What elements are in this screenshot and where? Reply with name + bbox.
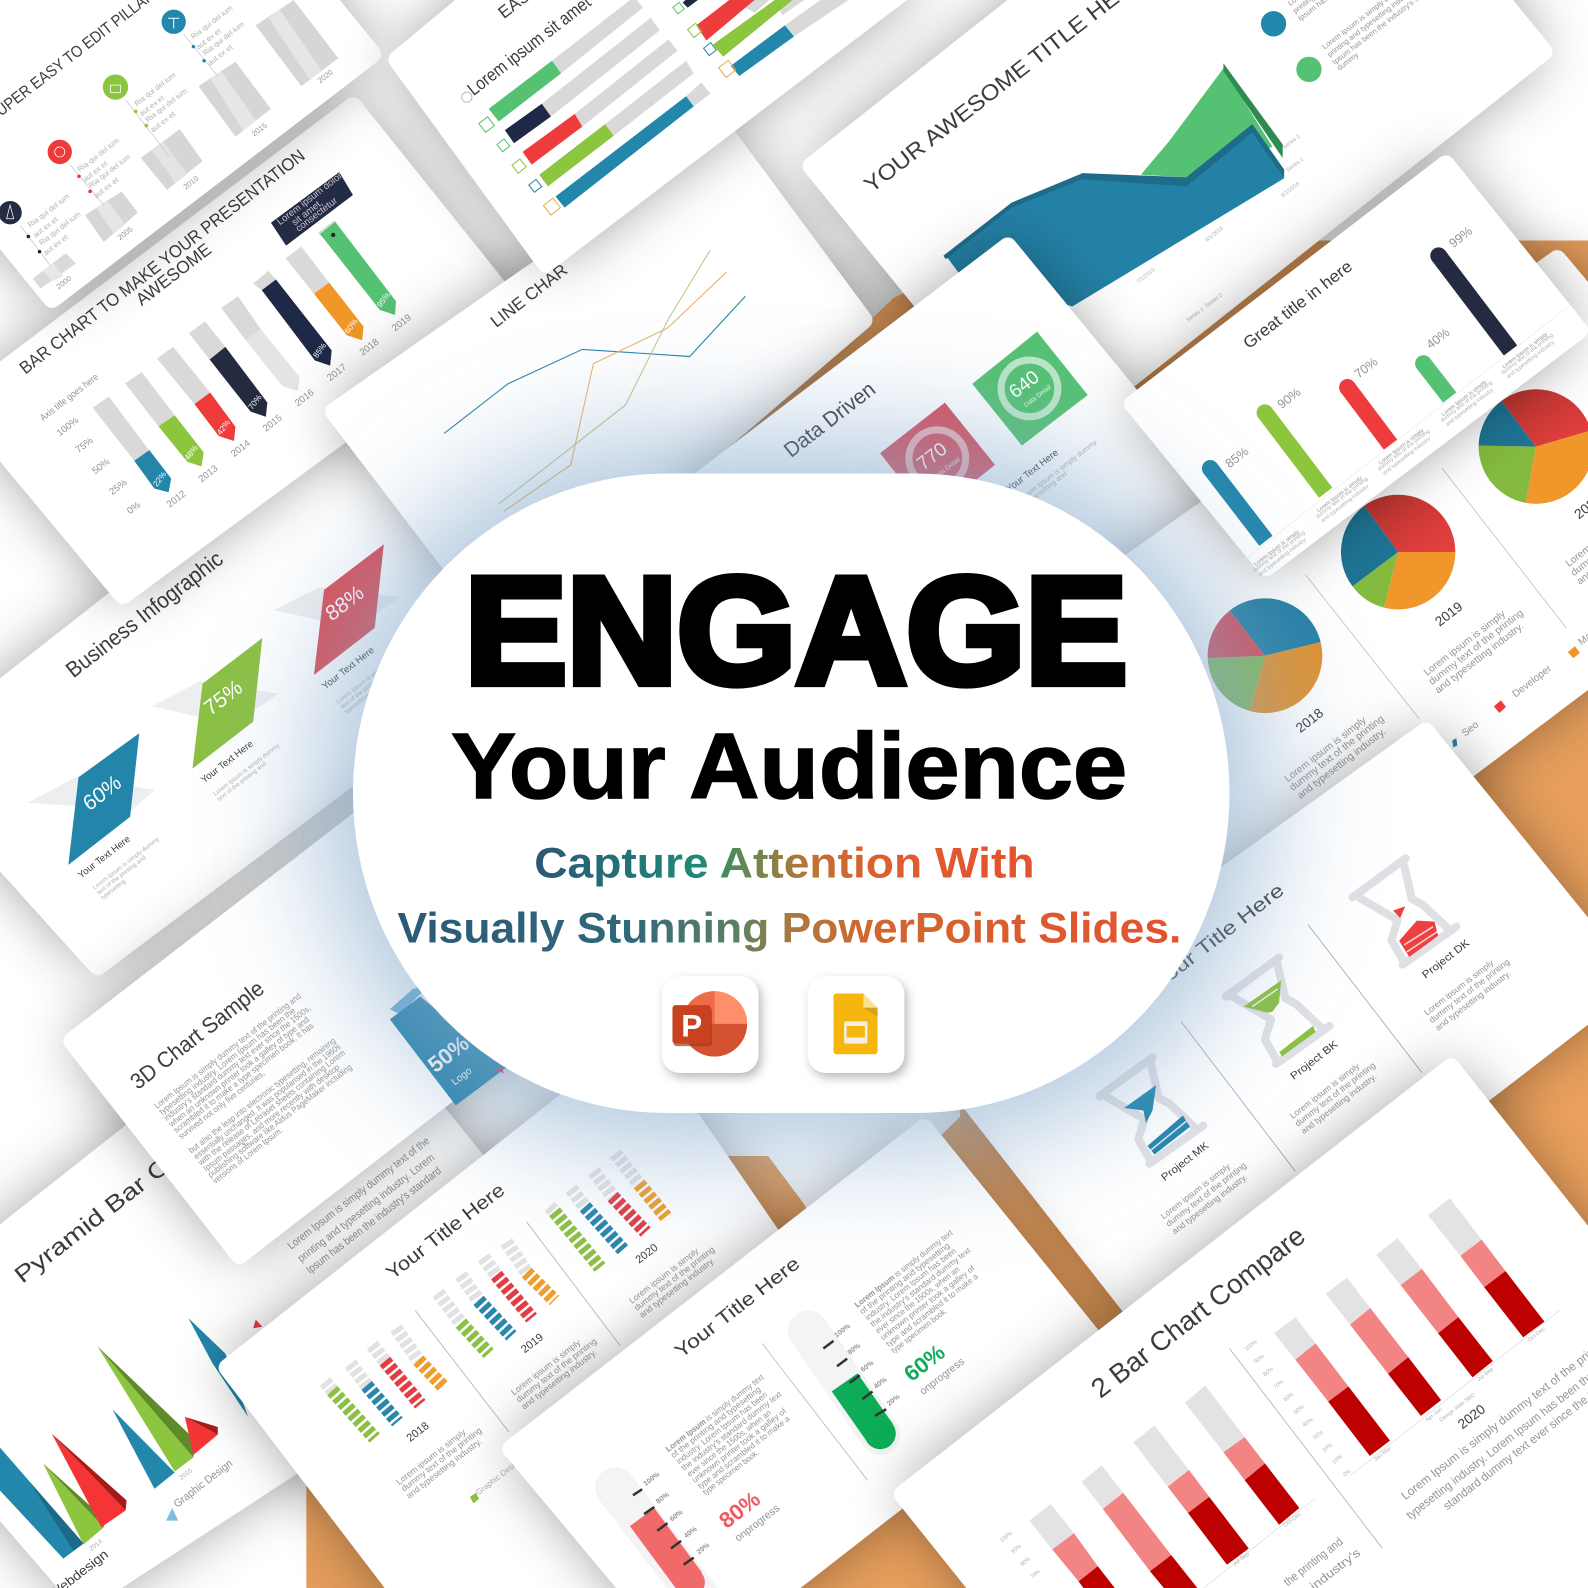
labels: chart years and descriptions: Design Web SBD — [1439, 1392, 1477, 1423]
chart: arrow bars: 85% — [311, 341, 328, 360]
chart: arrow bars: 70% — [247, 393, 263, 411]
icon: green test tube: 100% — [833, 1322, 853, 1339]
panel: area chart slide — [812, 0, 1543, 448]
text: notes under bars: Lorem Ipsum is simply — [1378, 428, 1426, 466]
text: note on slide: Lorem Ipsum is simply dummy text of the — [286, 1135, 432, 1252]
chart: lower stacked bars 2019: 100% — [999, 1531, 1014, 1544]
labels: project names and notes: Lorem ipsum is simply — [1422, 957, 1496, 1017]
chart axis labels — [38, 312, 414, 517]
heading: 3D chart sample: 3D Chart Sample — [125, 976, 269, 1094]
text: red tube description: type and scrambled it to make a — [695, 1413, 792, 1491]
text: chart description: essentially unchanged. It was popularised in the 1960s — [192, 1042, 343, 1161]
chart axis labels: 100% — [55, 415, 81, 439]
subtitle: your audience: Your Audience — [451, 714, 1127, 818]
labels: project names and notes: dummy text of the printing — [1164, 1160, 1248, 1229]
heading: business infographic: Business Infographic — [61, 546, 228, 682]
labels: project names and notes: dummy text of the printing — [1293, 1060, 1377, 1128]
heading: great title: Great title in here — [1239, 257, 1356, 353]
text: your text here: typesetting and — [1026, 471, 1069, 505]
chart axis labels: 2018 — [358, 337, 381, 358]
background: hidden slide behind upper cards — [304, 238, 1013, 861]
labels: pie years and notes: and typesetting industry. — [1295, 726, 1388, 801]
chart: pyramid bars — [0, 1318, 262, 1559]
text: notes under bars: Lorem Ipsum is simply — [1316, 475, 1364, 514]
text: labels under parallelograms: Your Text Here — [199, 739, 256, 786]
chart: three lines — [444, 251, 745, 511]
chart: arrow bars: 48% — [183, 444, 200, 462]
labels: project names and notes: dummy text of the printing — [1427, 957, 1512, 1025]
heading: data driven: Data Driven — [780, 378, 880, 462]
chart: grey pillars — [33, 0, 338, 289]
icon: red test tube: 20% — [696, 1542, 712, 1556]
callout: lorem tooltip: consectetur — [294, 195, 340, 234]
icon: green test tube: 60% — [860, 1359, 876, 1374]
text: chart description: Ipsum passages, and more recently with desktop — [201, 1062, 342, 1173]
labels: project names and notes: Lorem ipsum is simply — [1288, 1061, 1362, 1121]
labels: segmented column years and notes: and typesetting industry. — [404, 1436, 484, 1500]
chart: segmented columns 2019 — [438, 1242, 554, 1354]
labels: bar percentages — [1223, 224, 1475, 471]
legend: pyramid categories — [46, 1458, 235, 1588]
text: labels under parallelograms: typesetting — [100, 879, 127, 901]
chart: 3D area chart: 7/1/2015 — [1136, 267, 1157, 285]
chart: lower stacked bars 2019 — [999, 1385, 1316, 1588]
stat: 80 percent onprogress: 80% — [714, 1486, 765, 1533]
chart: upper stacked bars 2020: 20% — [1322, 1442, 1334, 1454]
chart: upper stacked bars 2020: 30% — [1312, 1430, 1325, 1441]
chart axis labels: 2017 — [325, 362, 349, 384]
labels: chart years and descriptions: the printing and — [1281, 1535, 1346, 1588]
labels: segmented column years and notes: Graphic Design — [474, 1456, 524, 1497]
panel: line chart slide — [334, 137, 863, 630]
text: chart description: with the release of Letraset sheets containing Lorem — [195, 1048, 347, 1168]
text: notes under bars: and typesetting industry — [1506, 340, 1556, 380]
labels: bar percentages: 99% — [1446, 224, 1475, 250]
legend: circles with notes — [1261, 0, 1440, 82]
text: pillar notes: 2020 — [316, 68, 335, 85]
legend: pie categories — [1452, 612, 1588, 747]
chart: pie 2020 — [1479, 389, 1588, 504]
labels: pie years and notes: dummy text of the printing — [1288, 714, 1387, 793]
legend: pyramid categories: Graphic Design — [172, 1458, 235, 1510]
labels: bar percentages: 70% — [1352, 355, 1380, 381]
text: red tube description: the industry's standard dummy text — [679, 1389, 784, 1473]
chart: lower stacked bars 2019: 80% — [1019, 1556, 1032, 1568]
text: chart description — [152, 991, 354, 1185]
chart: upper stacked bars 2020: Oct-Dec — [1527, 1326, 1547, 1343]
stat: 60 percent onprogress: onprogress — [918, 1356, 967, 1397]
chart axis labels: 2016 — [293, 387, 316, 409]
panel: pyramid chart slide — [0, 977, 575, 1588]
text: chart description: survived not only five centuries, — [176, 1068, 267, 1141]
text: pillar notes: Ria qui del ium — [144, 86, 189, 124]
text: pillar notes: Ria qui del ium — [76, 136, 121, 174]
labels: segmented column years and notes: Lorem ipsum is simply — [509, 1337, 583, 1397]
card: red metric 770 — [880, 403, 995, 517]
stat: 80 percent onprogress — [714, 1486, 782, 1544]
chart: arrow bars: 22% — [151, 470, 168, 488]
text: green tube description: Lorem Ipsum is simply dummy text — [852, 1227, 955, 1310]
text: red tube description: type specimen book. — [700, 1447, 761, 1497]
chart: 3D area chart: Series 2 — [1204, 292, 1224, 309]
labels: project names and notes: and typesetting industry. — [1299, 1072, 1378, 1136]
text: pillar notes: 2015 — [250, 121, 269, 138]
chart axis labels: 2014 — [229, 438, 253, 460]
text: labels under parallelograms: Lorem Ipsum is simply dummy — [213, 742, 282, 798]
icon: Google Slides — [808, 976, 904, 1073]
icons: bar row outlines — [462, 2, 736, 215]
chart axis labels: 2015 — [261, 413, 285, 434]
chart: lower stacked bars 2019: Oct-Dec — [1283, 1512, 1303, 1529]
text: red tube description: of the printing and typesetting — [669, 1384, 763, 1460]
callout: lorem tooltip: sit amet, — [290, 197, 325, 228]
icons: pillar circles — [0, 10, 218, 266]
chart: segmented columns 2020 — [549, 1154, 666, 1267]
text: red tube description — [663, 1372, 792, 1497]
panel: segmented bars slide — [228, 1044, 899, 1588]
chart: 3D area chart: 6/1/2016 — [1280, 181, 1301, 199]
heading: your title here: Your Title Here — [382, 1180, 509, 1284]
chart axis labels: 25% — [107, 477, 130, 498]
chart: 3D area chart: 6/1/2015 — [1204, 226, 1225, 244]
labels: project names and notes: Lorem ipsum is simply — [1159, 1161, 1233, 1221]
callout: lorem tooltip: Lorem ipsum dolor — [275, 170, 345, 228]
chart: upper stacked bars 2020: Jan-Mar — [1373, 1446, 1393, 1463]
tagline: visually stunning slides: Visually Stunning PowerPoint Slides. — [398, 904, 1181, 952]
labels: segmented column years and notes: 2019 — [519, 1331, 546, 1356]
text: note on slide: Ipsum has been the industry's standard — [304, 1165, 444, 1276]
labels: segmented column years and notes: 2020 — [633, 1242, 660, 1266]
text: chart description: typesetting industry. Lorem Ipsum has been the — [157, 1005, 297, 1117]
icon: red test tube: 80% — [655, 1491, 671, 1506]
chart: horizontal progress bars — [489, 0, 871, 208]
text: pillar notes: aut ex et — [206, 42, 235, 67]
text: labels under parallelograms: Your Text Here — [320, 645, 377, 692]
chart: lower stacked bars 2019: 90% — [1010, 1544, 1023, 1555]
text: notes under bars: Lorem Ipsum is simply — [1501, 332, 1549, 370]
heading: bar chart title: BAR CHART TO MAKE YOUR PRESENTATION — [15, 145, 309, 378]
chart: 3D column: Logo — [450, 1065, 475, 1088]
text: red tube description: Lorem Ipsum is simply dummy text — [663, 1372, 766, 1454]
labels: segmented column years and notes: 2018 — [405, 1420, 432, 1445]
labels: project names and notes: and typesetting industry. — [1170, 1172, 1249, 1236]
card: red metric 770: Data Detail — [932, 456, 962, 482]
chart: arrow bars: 42% — [215, 418, 232, 437]
chart axis labels: Axis title goes here — [38, 372, 101, 424]
chart: upper stacked bars 2020: 10% — [1331, 1454, 1344, 1466]
text: chart description: but also the leap into electronic typesetting, remaining — [186, 1035, 338, 1155]
text: red tube description: unknown printer took a galley of — [690, 1405, 789, 1485]
stat: 60 percent onprogress — [899, 1339, 967, 1397]
chart: 3D area chart: Series 2 — [1282, 134, 1302, 151]
text: your text here: Lorem Ipsum is simply dummy — [1019, 439, 1099, 503]
legend: pyramid categories: 2015 — [178, 1467, 194, 1482]
tagline: capture attention: Capture Attention With — [534, 840, 1035, 888]
text: your text here: Your Text Here — [1004, 448, 1061, 495]
panel: test tube slide — [511, 1128, 1098, 1588]
text: labels under parallelograms — [76, 645, 405, 901]
text: notes under bars: and typesetting industry — [1382, 436, 1432, 477]
icon: green test tube: 80% — [847, 1342, 863, 1357]
icon: green hourglass — [1226, 958, 1330, 1064]
heading: 2 bar chart compare: 2 Bar Chart Compare — [1085, 1220, 1311, 1404]
chart axis labels: 0% — [125, 499, 143, 517]
panel: data driven slide — [671, 247, 1228, 777]
labels: segmented column years and notes: Lorem ipsum is simply — [627, 1245, 701, 1305]
text: pillar notes: 2010 — [181, 174, 200, 191]
panel: central white badge — [353, 473, 1229, 1113]
text: pillar notes: aut ex et — [137, 93, 167, 118]
text: green tube description: industry. Lorem Ipsum has been — [863, 1246, 958, 1322]
text: notes under bars: and typesetting industry — [1257, 537, 1308, 578]
chart: upper stacked bars 2020: Jul-Sep — [1476, 1367, 1495, 1383]
callout: lorem tooltip — [271, 170, 353, 246]
text: pillar notes: 2005 — [116, 225, 135, 242]
chart: lower stacked bars 2019: Jul-Sep — [1232, 1552, 1251, 1568]
panel: great title bars slide — [1133, 165, 1579, 578]
text: red tube description: industry. Lorem Ipsum has been — [674, 1389, 769, 1466]
text: chart description: versions of Lorem Ipsum. — [210, 1125, 284, 1185]
chart: upper stacked bars 2020: 80% — [1262, 1366, 1275, 1378]
text: green tube description — [852, 1227, 980, 1355]
text: chart description: Lorem Ipsum is simply dummy text of the printing and — [152, 991, 303, 1111]
text: red tube description: ever since the 1500s, when an — [685, 1407, 773, 1479]
labels: segmented column years and notes: Lorem ipsum is simply — [394, 1427, 468, 1487]
text: pillar notes: Ria qui del ium — [37, 210, 82, 247]
text: green tube description: type and scrambled it to make a — [884, 1271, 980, 1349]
labels: pie years and notes: and typesetting industry. — [1433, 621, 1526, 696]
labels: chart years and descriptions: 2020 — [1455, 1401, 1489, 1432]
chart: arrow bars: 95% — [375, 291, 392, 309]
chart: three percent parallelograms — [28, 544, 400, 865]
icon: PowerPoint — [662, 976, 759, 1073]
heading: bar chart title: AWESOME — [132, 239, 215, 309]
panel: 3D chart sample slide — [72, 747, 620, 1255]
labels: project names and notes: Project BK — [1288, 1038, 1340, 1082]
icon: red hourglass — [1353, 858, 1456, 965]
chart axis labels: 2012 — [165, 489, 188, 510]
chart: arrow bars: 60% — [343, 317, 360, 335]
legend: circles with notes: dummy — [1335, 50, 1360, 72]
background: hidden slide behind lower-left cards — [304, 709, 962, 1367]
text: pillar notes — [26, 3, 335, 291]
text: notes under bars: dummy text of the printing — [1315, 476, 1369, 520]
heading: pyramid bar chart: Pyramid Bar Chart — [9, 1122, 214, 1288]
chart: 3D area chart: Series 1 — [1185, 306, 1205, 324]
chart: upper stacked bars 2020: 50% — [1293, 1404, 1305, 1416]
text: chart description: scrambled it to make a type specimen book. It has — [171, 1020, 315, 1135]
labels: bar percentages: 85% — [1223, 444, 1251, 471]
heading: your title here: Your Title Here — [671, 1253, 804, 1363]
chart axis labels: 50% — [90, 456, 113, 477]
chart: three percent parallelograms: 75% — [200, 675, 247, 721]
labels: segmented column years and notes — [394, 1242, 717, 1503]
icon: red test tube — [615, 1471, 712, 1588]
chart: upper stacked bars 2020: 60% — [1283, 1392, 1295, 1403]
text: labels under parallelograms: Lorem Ipsum is simply dummy — [336, 650, 405, 705]
text: green tube description: the industry's standard dummy text — [868, 1245, 973, 1329]
labels: pie years and notes: 2019 — [1432, 599, 1466, 629]
text: notes under bars: dummy text of the printing — [1377, 429, 1431, 472]
chart: upper stacked bars 2020: 100% — [1244, 1339, 1259, 1353]
icon: red test tube: 100% — [643, 1471, 662, 1488]
chart: three percent parallelograms: 60% — [79, 771, 126, 816]
text: pillar notes: aut ex et — [194, 26, 223, 51]
text: green tube description: of the printing and typesetting — [857, 1240, 952, 1316]
chart: segmented columns 2018 — [325, 1328, 443, 1438]
text: chart description: when an unknown printer took a galley of type and — [166, 1014, 311, 1129]
panel: pillar chart slide — [0, 0, 372, 299]
text: pillar notes: aut ex et — [31, 214, 60, 240]
labels: project names and notes: Project MK — [1159, 1140, 1211, 1184]
text: green tube description: ever since the 1500s, when an — [873, 1264, 962, 1335]
text: pillar notes: Ria qui del ium — [26, 192, 71, 229]
icon: green test tube: 40% — [873, 1376, 889, 1391]
labels: bar percentages: 40% — [1424, 325, 1452, 352]
text: chart description: publishing software like Aldus PageMaker including — [206, 1062, 354, 1179]
legend: pyramid categories: 2014 — [88, 1538, 104, 1553]
text: pillar notes: aut ex et — [81, 159, 110, 184]
text: labels under parallelograms: Your Text Here — [76, 834, 133, 881]
labels: project names and notes: and typesetting industry. — [1433, 968, 1513, 1033]
background: orange panel — [306, 241, 1588, 1588]
text: note on slide: printing and typesetting industry. Lorem — [296, 1152, 437, 1265]
labels: segmented column years and notes: dummy text of the printing — [399, 1425, 484, 1493]
labels: pie years and notes: Lorem ipsum is simply — [1422, 608, 1509, 678]
heading: your title here: Your Title Here — [1149, 880, 1289, 994]
text: notes under bars: Lorem Ipsum is simply — [1441, 379, 1488, 418]
labels: pie years and notes: Lorem ipsum is simply — [1283, 715, 1369, 785]
text: notes under bars: and typesetting industry — [1445, 387, 1495, 428]
text: green tube description: type specimen book. — [889, 1306, 949, 1355]
labels: segmented column years and notes: dummy text of the printing — [514, 1336, 599, 1404]
labels: project names and notes: Project DK — [1420, 937, 1472, 981]
chart: upper stacked bars 2020: Apr-Jun — [1424, 1407, 1444, 1423]
chart: rounded column bars — [1202, 247, 1511, 541]
text: notes under bars: Lorem Ipsum is simply — [1253, 529, 1301, 568]
text: notes under bars: dummy text of the printing — [1440, 380, 1494, 424]
chart: pie 2018 — [1208, 598, 1322, 713]
icon: green test tube: 20% — [886, 1393, 902, 1408]
text: pillar notes: aut ex et — [149, 109, 178, 134]
text: labels under parallelograms: Lorem Ipsum is simply dummy — [92, 836, 161, 891]
panel: two bar chart compare slide — [903, 1067, 1588, 1588]
chart axis labels: 2019 — [390, 312, 414, 334]
text: notes under bars: dummy text of the printing — [1252, 530, 1307, 574]
text: labels under parallelograms: text of the printing and — [340, 669, 391, 710]
panel: business infographic slide — [0, 413, 537, 966]
chart: upper stacked bars 2020: 0% — [1342, 1469, 1353, 1478]
labels: segmented column years and notes: dummy text of the printing — [632, 1244, 717, 1313]
chart: lower stacked bars 2019: 70% — [1030, 1569, 1042, 1580]
icon: PowerPoint: P — [681, 1009, 702, 1044]
labels: project names and notes — [1159, 937, 1513, 1236]
text: labels under parallelograms: text of the printing and — [217, 761, 268, 803]
labels: segmented column years and notes: and typesetting industry. — [637, 1255, 716, 1320]
chart: upper stacked bars 2020: 90% — [1253, 1354, 1266, 1365]
labels: bar percentages: 90% — [1275, 385, 1304, 411]
chart: 3D column: 50% — [423, 1031, 474, 1077]
text: pillar notes: aut ex et — [41, 232, 71, 257]
text: notes under bars: and typesetting industry — [1320, 483, 1370, 524]
text: pillar notes: Ria qui del ium — [201, 20, 246, 57]
heading: line chart title: LINE CHAR — [486, 260, 571, 331]
chart: 3D area chart — [943, 63, 1305, 324]
chart: upper stacked bars 2020: 70% — [1273, 1379, 1285, 1391]
card: red metric 770: 770 — [913, 439, 952, 475]
icon: red test tube: 40% — [683, 1525, 699, 1540]
text: labels under parallelograms: text of the printing and — [96, 855, 147, 896]
labels: pie years and notes: 2018 — [1293, 705, 1326, 736]
chart: three percent parallelograms: 88% — [322, 581, 368, 626]
labels: chart years and descriptions — [1281, 1319, 1588, 1588]
chart: 3D column — [390, 984, 506, 1105]
labels: pie years and notes — [1283, 491, 1588, 801]
text: pillar notes: Ria qui del ium — [132, 70, 178, 108]
panel: pie charts slide — [1015, 259, 1588, 939]
legend: pie categories: Developer — [1511, 663, 1554, 700]
text: labels under parallelograms: typesetting — [344, 693, 371, 716]
text: pillar notes: 2000 — [54, 274, 73, 291]
panel: bar chart slide — [0, 106, 514, 595]
labels: segmented column years and notes: and typesetting industry. — [519, 1347, 599, 1411]
chart: arrow bars — [93, 220, 396, 492]
labels: pie years and notes: dummy text of the printing — [1427, 608, 1526, 687]
text: notes under bars: dummy text of the printing — [1500, 333, 1555, 376]
text: pillar notes: aut ex et — [92, 175, 121, 200]
text: chart description: industry's standard dummy text ever since the 1500s, — [162, 1003, 313, 1123]
text: pillar notes: Ria qui del ium — [87, 152, 132, 190]
icon: blue hourglass — [1099, 1057, 1203, 1164]
text: pillar notes: Ria qui del ium — [189, 3, 234, 41]
card: green metric 640: 640 — [1005, 367, 1044, 403]
chart: pie 2019 — [1341, 495, 1455, 609]
panel: horizontal bars slide — [398, 0, 914, 263]
stat: 80 percent onprogress: onprogress — [733, 1502, 782, 1544]
chart axis labels: 2013 — [197, 463, 220, 485]
card: green metric 640: Data Detail — [1023, 384, 1053, 409]
title: ENGAGE: ENGAGE — [465, 546, 1127, 716]
text: green tube description: unknown printer took a galley of — [878, 1263, 977, 1342]
chart: 3D area chart: Series 1 — [1285, 157, 1305, 174]
stat: 60 percent onprogress: 60% — [899, 1339, 950, 1386]
chart axis labels: 75% — [74, 435, 96, 456]
text: notes under bars — [1252, 332, 1556, 578]
legend: pie categories: Seo — [1460, 719, 1481, 739]
panel: hourglass slide — [948, 732, 1588, 1343]
icon: green test tube — [808, 1322, 902, 1449]
card: green metric 640 — [972, 332, 1088, 446]
icon: red test tube: 60% — [669, 1509, 685, 1523]
chart: upper stacked bars 2020: 40% — [1302, 1417, 1315, 1429]
chart: upper stacked bars 2020 — [1244, 1198, 1560, 1478]
glow behind central badge — [319, 441, 1264, 1144]
